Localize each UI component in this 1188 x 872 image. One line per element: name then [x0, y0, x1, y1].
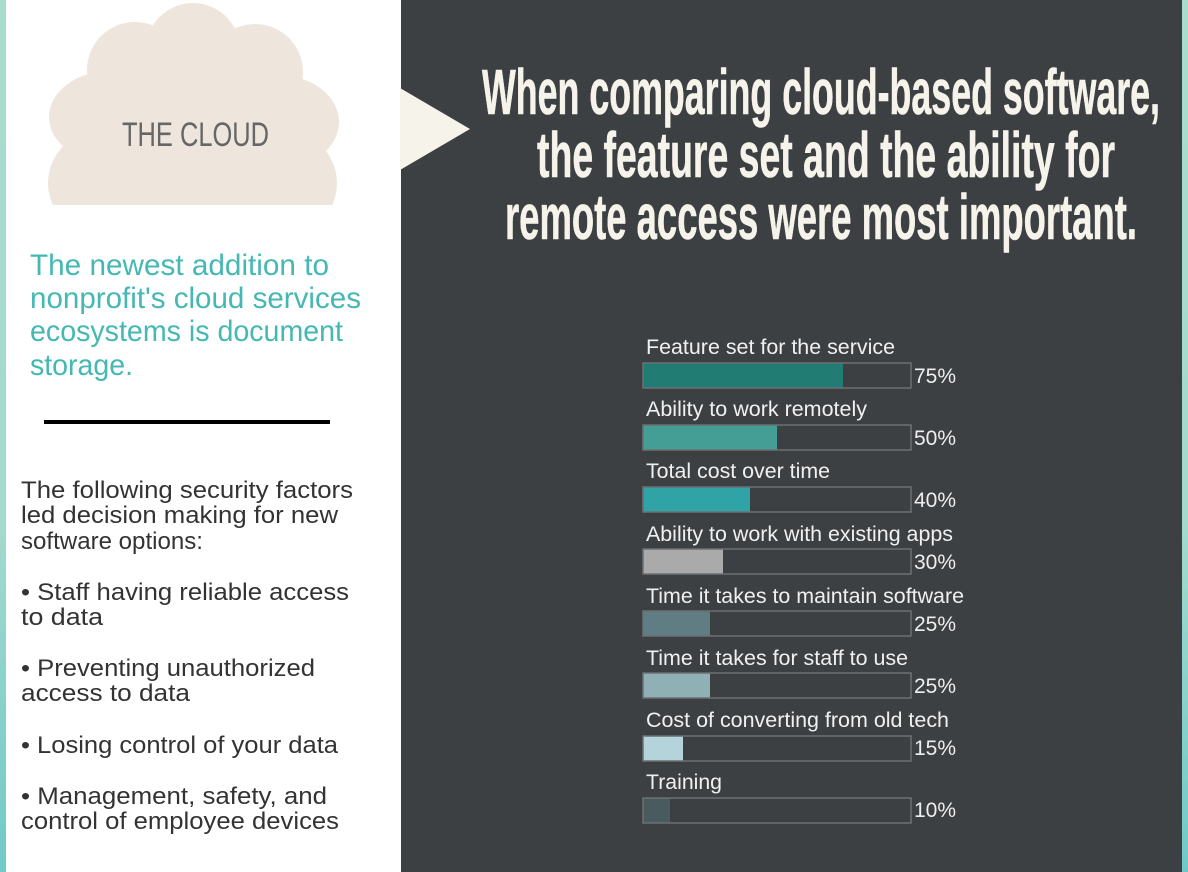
bar: feature set 75%: Feature set for the service: [646, 336, 895, 359]
security factors text block: to data: [21, 604, 104, 631]
icon: cloud with label: [48, 3, 339, 205]
bar: maintain software 25%: 25%: [914, 613, 956, 636]
security factors text block: [21, 477, 353, 835]
left edge strip: [0, 0, 6, 872]
security factors text block: led decision making for new: [21, 502, 339, 529]
bar: training 10%: 10%: [914, 799, 956, 822]
bar: existing apps 30%: Ability to work with existing apps: [646, 523, 953, 546]
bar: total cost 40%: Total cost over time: [646, 460, 830, 483]
divider line: [44, 420, 330, 424]
icon: cloud with label: THE CLOUD: [122, 116, 269, 154]
bar chart: [643, 336, 964, 823]
teal callout text: storage.: [30, 349, 133, 382]
icon: arrow pointing to headline: [400, 88, 470, 170]
bar: converting cost 15%: 15%: [914, 737, 956, 760]
panel: dark right panel: [401, 0, 1182, 872]
bar: work remotely 50%: [643, 398, 956, 450]
security factors text block: access to data: [21, 680, 191, 707]
teal callout text: nonprofit's cloud services: [30, 282, 361, 315]
security factors text block: • Preventing unauthorized: [21, 655, 315, 682]
security factors text block: The following security factors: [21, 477, 353, 504]
bar: work remotely 50%: 50%: [914, 427, 956, 450]
bar: training 10%: Training: [646, 771, 722, 794]
security factors text block: • Staff having reliable access: [21, 579, 349, 606]
bar: maintain software 25%: [643, 585, 964, 636]
bar: feature set 75%: [643, 336, 956, 388]
headline: [482, 56, 1160, 253]
teal callout text: [30, 249, 361, 382]
bar: existing apps 30%: [643, 523, 956, 574]
teal callout text: The newest addition to: [30, 249, 329, 282]
bar: staff to use 25%: [643, 647, 956, 698]
bar: existing apps 30%: 30%: [914, 551, 956, 574]
security factors text block: • Management, safety, and: [21, 783, 327, 810]
bar: work remotely 50%: Ability to work remotely: [646, 398, 868, 421]
bar: staff to use 25%: Time it takes for staff to use: [646, 647, 908, 670]
bar: feature set 75%: 75%: [914, 365, 956, 388]
bar: training 10%: [643, 771, 956, 823]
bar: converting cost 15%: Cost of converting from old tech: [646, 709, 949, 732]
teal callout text: ecosystems is document: [30, 315, 344, 348]
bar: total cost 40%: [643, 460, 956, 512]
bar: maintain software 25%: Time it takes to maintain software: [646, 585, 964, 608]
security factors text block: control of employee devices: [21, 808, 339, 835]
bar: converting cost 15%: [643, 709, 956, 761]
right edge strip: [1182, 0, 1188, 872]
security factors text block: software options:: [21, 528, 203, 555]
bar: total cost 40%: 40%: [914, 489, 956, 512]
security factors text block: • Losing control of your data: [21, 732, 339, 759]
bar: staff to use 25%: 25%: [914, 675, 956, 698]
